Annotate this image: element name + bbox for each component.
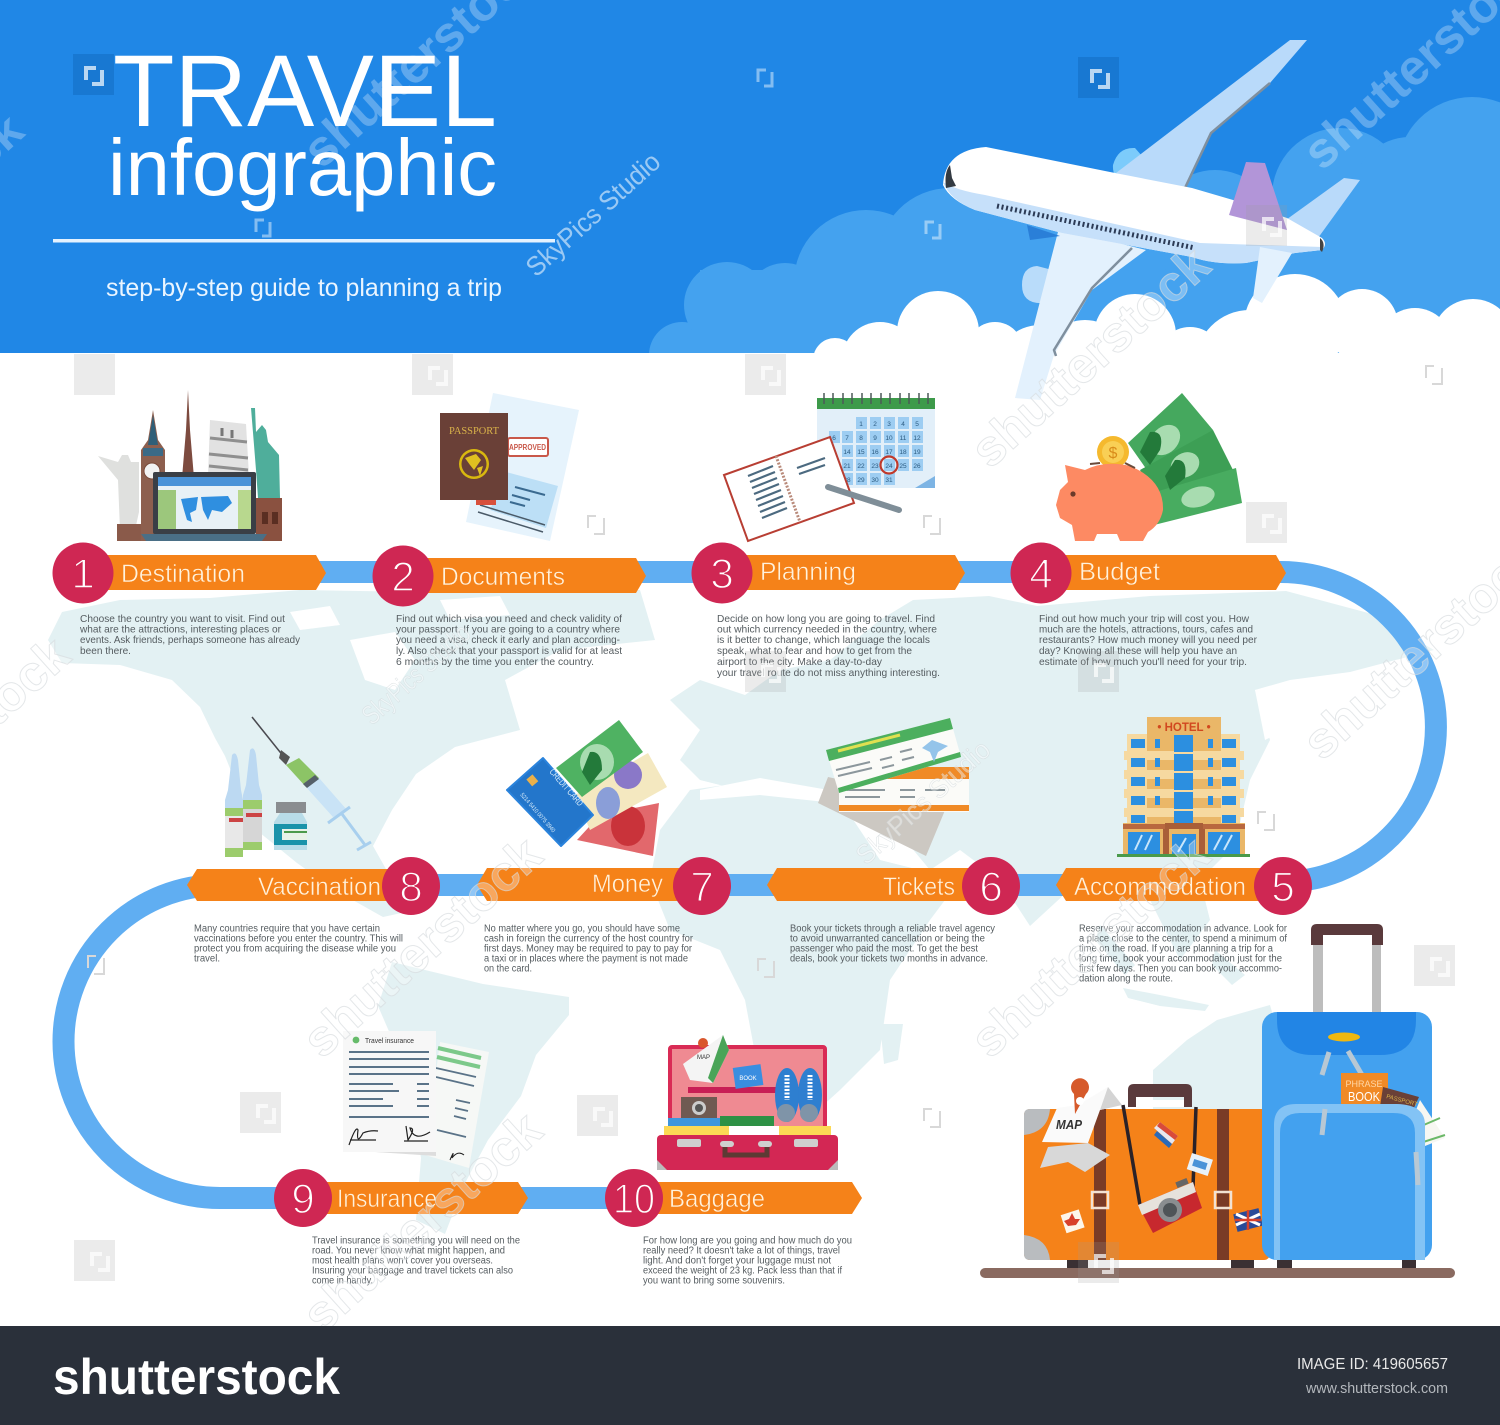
text: planning: your travel route do not miss anything interesting. xyxy=(717,667,940,679)
watermark: stock text: shutterstock xyxy=(960,826,1220,1068)
text: tickets xyxy=(790,924,995,964)
footer bar xyxy=(0,1326,1500,1425)
icon: insurance documents: Travel insurance xyxy=(365,1036,414,1045)
footer logo: shutterstock xyxy=(53,1349,340,1405)
icon: calendar and planner: 3 xyxy=(887,421,891,428)
title xyxy=(108,34,497,212)
text: planning: speak, what to fear and how to get from the xyxy=(717,645,912,657)
step 2 banner: 2 xyxy=(391,553,415,600)
icon: passport and visa xyxy=(440,393,579,541)
watermark: stock text: shutterstock xyxy=(292,826,552,1068)
text: budget xyxy=(1039,613,1257,668)
step 2 banner xyxy=(372,546,646,606)
step 7 banner: 7 xyxy=(690,863,714,910)
text: tickets: passenger who paid the most. To get the best xyxy=(790,944,978,954)
text: accommodation: Reserve your accommodation in advance. Look for xyxy=(1079,924,1288,934)
icon: hotel building: • HOTEL • xyxy=(1157,722,1211,734)
page body white xyxy=(0,353,1500,1326)
illustration: airplane xyxy=(943,40,1360,400)
icon: calendar and planner: 12 xyxy=(913,435,921,442)
icon: calendar and planner: 26 xyxy=(913,463,921,470)
text: baggage xyxy=(643,1236,852,1286)
text: documents: 6 months by the time you enter the country. xyxy=(396,656,594,668)
text: money: No matter where you go, you should have some xyxy=(484,924,680,934)
watermark: small stock marks xyxy=(73,54,1455,1283)
icon: open suitcase: BOOK xyxy=(739,1076,757,1082)
step 8 banner: Vaccination xyxy=(258,873,381,901)
step 6 banner: Tickets xyxy=(883,873,955,901)
icon: calendar and planner: 19 xyxy=(913,449,921,456)
text: vaccination: Many countries require that you have certain xyxy=(194,924,380,934)
icon: calendar and planner: 9 xyxy=(873,435,877,442)
icon: calendar and planner: 2 xyxy=(873,421,877,428)
step 6 banner: 6 xyxy=(979,863,1003,910)
watermark: stock text: shutterstock xyxy=(292,1101,552,1343)
route path xyxy=(63,572,1436,1198)
illustration: orange suitcase xyxy=(1024,1078,1270,1268)
icon: calendar and planner: 22 xyxy=(857,463,865,470)
icon: calendar and planner: 11 xyxy=(900,435,907,442)
footer image id: IMAGE ID: 419605657 xyxy=(1297,1356,1448,1373)
watermark: stock text: shutterstock xyxy=(960,236,1220,478)
icon: vaccines and syringe xyxy=(225,717,371,857)
icon: airline tickets xyxy=(818,718,969,856)
step 4 banner: 4 xyxy=(1029,550,1053,597)
icon: passport and visa: APPROVED xyxy=(509,443,546,452)
text: tickets: deals, book your tickets two months in advance. xyxy=(790,954,988,964)
text: budget: much are the hotels, attractions, tours, cafes and xyxy=(1039,624,1253,636)
illustration: blue suitcase: PASSPORT xyxy=(1385,1094,1418,1108)
text: accommodation: long time, book your accommodation just for the xyxy=(1079,954,1282,964)
text: money: a taxi or in places where the payment is not made xyxy=(484,954,688,964)
step 4 banner xyxy=(1010,542,1286,604)
icon: calendar and planner: 29 xyxy=(857,477,865,484)
step 7 banner: Money xyxy=(592,870,663,898)
icon: calendar and planner: 1 xyxy=(859,421,863,428)
icon: calendar and planner: 17 xyxy=(885,449,893,456)
icon: calendar and planner: 6 xyxy=(832,435,836,442)
step 3 banner xyxy=(692,542,965,604)
step 1 banner: 1 xyxy=(71,550,95,597)
icon: money and credit card xyxy=(507,720,667,856)
title divider xyxy=(53,239,555,242)
step 5 banner: 5 xyxy=(1271,863,1295,910)
step 1 banner xyxy=(52,542,326,604)
step 10 banner: Baggage xyxy=(669,1185,765,1213)
text: baggage: light. And don't forget your luggage must not xyxy=(643,1256,831,1266)
icon: hotel building xyxy=(1117,717,1250,857)
icon: open suitcase xyxy=(657,1035,838,1170)
icon: calendar and planner: 7 xyxy=(845,435,849,442)
icon: calendar and planner: 18 xyxy=(899,449,907,456)
icon: calendar and planner: 5 xyxy=(915,421,919,428)
icon: open suitcase: MAP xyxy=(697,1055,710,1061)
icon: calendar and planner: 31 xyxy=(885,477,893,484)
watermark: studio text: SkyPics Studio xyxy=(850,734,996,870)
text: planning: is it better to change, which language the locals xyxy=(717,634,930,646)
text: budget: estimate of how much you'll need for your trip. xyxy=(1039,656,1247,668)
text: baggage: you want to bring some souvenirs. xyxy=(643,1276,785,1286)
text: destination: been there. xyxy=(80,645,131,657)
step 10 banner xyxy=(605,1169,862,1227)
step 4 banner: Budget xyxy=(1079,558,1160,586)
subtitle: step-by-step guide to planning a trip xyxy=(106,274,502,302)
watermark: studio text: SkyPics Studio xyxy=(520,146,666,282)
illustration: orange suitcase: MAP xyxy=(1056,1117,1082,1132)
icon: world landmarks and laptop xyxy=(98,390,282,541)
text: insurance: Travel insurance is something you will need on the xyxy=(312,1236,520,1246)
step 8 banner: 8 xyxy=(399,863,423,910)
text: money: cash in foreign the currency of the host country for xyxy=(484,934,694,944)
step 9 banner xyxy=(274,1169,528,1227)
clouds: front white clouds xyxy=(813,274,1500,420)
step 1 banner: Destination xyxy=(121,560,245,588)
illustration: blue suitcase: PHRASE xyxy=(1345,1079,1383,1089)
text: tickets: to avoid unwarranted cancellation or being the xyxy=(790,934,985,944)
text: planning xyxy=(717,613,940,679)
title: TRAVEL xyxy=(113,34,497,148)
icon: calendar and planner: 10 xyxy=(885,435,893,442)
step 5 banner xyxy=(1056,857,1312,915)
text: accommodation xyxy=(1079,924,1288,984)
text: accommodation: a place close to the center, to spend a minimum of xyxy=(1079,934,1287,944)
text: money: first days. Money may be required to pay to pay for xyxy=(484,944,693,954)
text: documents: ly. Also check that your passport is valid for at least xyxy=(396,645,622,657)
icon: calendar and planner: 4 xyxy=(901,421,905,428)
background world map xyxy=(48,590,1434,1234)
text: planning: out which currency needed in the country, where xyxy=(717,624,937,636)
step 6 banner xyxy=(767,857,1020,915)
text: insurance xyxy=(312,1236,520,1286)
step 7 banner xyxy=(477,857,731,915)
text: destination: what are the attractions, interesting places or xyxy=(79,624,281,636)
text: documents: you need a visa, check it early and plan according- xyxy=(396,634,620,646)
text: baggage: For how long are you going and how much do you xyxy=(643,1236,852,1246)
text: insurance: come in handy. xyxy=(312,1276,373,1286)
text: documents: Find out which visa you need and check validity of xyxy=(396,613,622,625)
icon: money and credit card: CREDIT CARD xyxy=(547,767,585,808)
step 9 banner: Insurance xyxy=(337,1185,437,1213)
title: infographic xyxy=(108,123,497,212)
icon: calendar and planner: 8 xyxy=(859,435,863,442)
text: destination xyxy=(79,613,301,657)
icon: money and credit card: 5214 5410 0075 3940 xyxy=(518,792,556,834)
icon: calendar and planner: 15 xyxy=(857,449,865,456)
text: baggage: really need? It doesn't take a lot of things, travel xyxy=(643,1246,840,1256)
text: insurance: Insuring your baggage and travel tickets can also xyxy=(312,1266,513,1276)
clouds: back blue clouds xyxy=(649,97,1500,388)
icon: calendar and planner: 24 xyxy=(885,463,893,470)
text: planning: airport to the city. Make a day-to-day xyxy=(717,656,883,668)
floor bar xyxy=(980,1268,1455,1278)
icon: calendar and planner: 21 xyxy=(843,463,851,470)
footer website: www.shutterstock.com xyxy=(1305,1381,1448,1397)
text: tickets: Book your tickets through a reliable travel agency xyxy=(790,924,995,934)
text: insurance: road. You never know what might happen, and xyxy=(312,1246,505,1256)
step 8 banner xyxy=(187,857,440,915)
text: budget: restaurants? How much money will you need per xyxy=(1039,634,1257,646)
text: vaccination: vaccinations before you enter the country. This will xyxy=(194,934,403,944)
icon: calendar and planner: 23 xyxy=(871,463,879,470)
illustration: blue suitcase: BOOK xyxy=(1348,1089,1380,1104)
icon: passport and visa: PASSPORT xyxy=(449,426,500,437)
text: accommodation: time on the road. If you are planning a trip for a xyxy=(1079,944,1273,954)
panel: sky header xyxy=(0,0,1500,353)
text: vaccination xyxy=(194,924,403,964)
icon: calendar and planner: 14 xyxy=(843,449,851,456)
icon: calendar and planner: 25 xyxy=(899,463,907,470)
text: money: on the card. xyxy=(484,964,532,974)
step 3 banner: 3 xyxy=(710,550,734,597)
watermark: studio text xyxy=(356,146,996,870)
step 10 banner: 10 xyxy=(613,1175,655,1222)
icon: calendar and planner: 30 xyxy=(871,477,879,484)
text: vaccination: travel. xyxy=(194,954,220,964)
icon: calendar and planner xyxy=(724,393,935,541)
icon: piggy bank and banknotes xyxy=(1056,393,1242,541)
icon: piggy bank and banknotes: $ xyxy=(1109,445,1118,462)
text: accommodation: first few days. Then you can book your accommo- xyxy=(1079,964,1282,974)
step 2 banner: Documents xyxy=(441,563,565,591)
text: documents: your passport. If you are going to a country where xyxy=(396,624,620,636)
icon: insurance documents xyxy=(343,1031,489,1168)
world map gaps: seas and lakes xyxy=(290,596,1295,930)
watermark: studio text: SkyPics Studio xyxy=(356,618,476,730)
icon: calendar and planner: 28 xyxy=(843,477,851,484)
text: money xyxy=(484,924,694,974)
icon: calendar and planner: 16 xyxy=(871,449,879,456)
text: destination: events. Ask friends, perhaps someone has already xyxy=(80,634,301,646)
illustration: blue suitcase xyxy=(1262,924,1445,1268)
step 3 banner: Planning xyxy=(760,558,856,586)
text: budget: day? Knowing all these will help you have an xyxy=(1039,645,1237,657)
text: planning: Decide on how long you are going to travel. Find xyxy=(717,613,935,625)
text: documents xyxy=(396,613,622,668)
text: insurance: most health plans won't cover you overseas. xyxy=(312,1256,493,1266)
step 5 banner: Accommodation xyxy=(1074,873,1246,901)
text: destination: Choose the country you want to visit. Find out xyxy=(80,613,285,625)
text: budget: Find out how much your trip will cost you. How xyxy=(1039,613,1249,625)
step 9 banner: 9 xyxy=(291,1175,315,1222)
text: accommodation: dation along the route. xyxy=(1079,974,1173,984)
text: baggage: exceed the weight of 23 kg. Pack less than that if xyxy=(643,1266,842,1276)
text: vaccination: protect you from acquiring the disease while you xyxy=(194,944,396,954)
